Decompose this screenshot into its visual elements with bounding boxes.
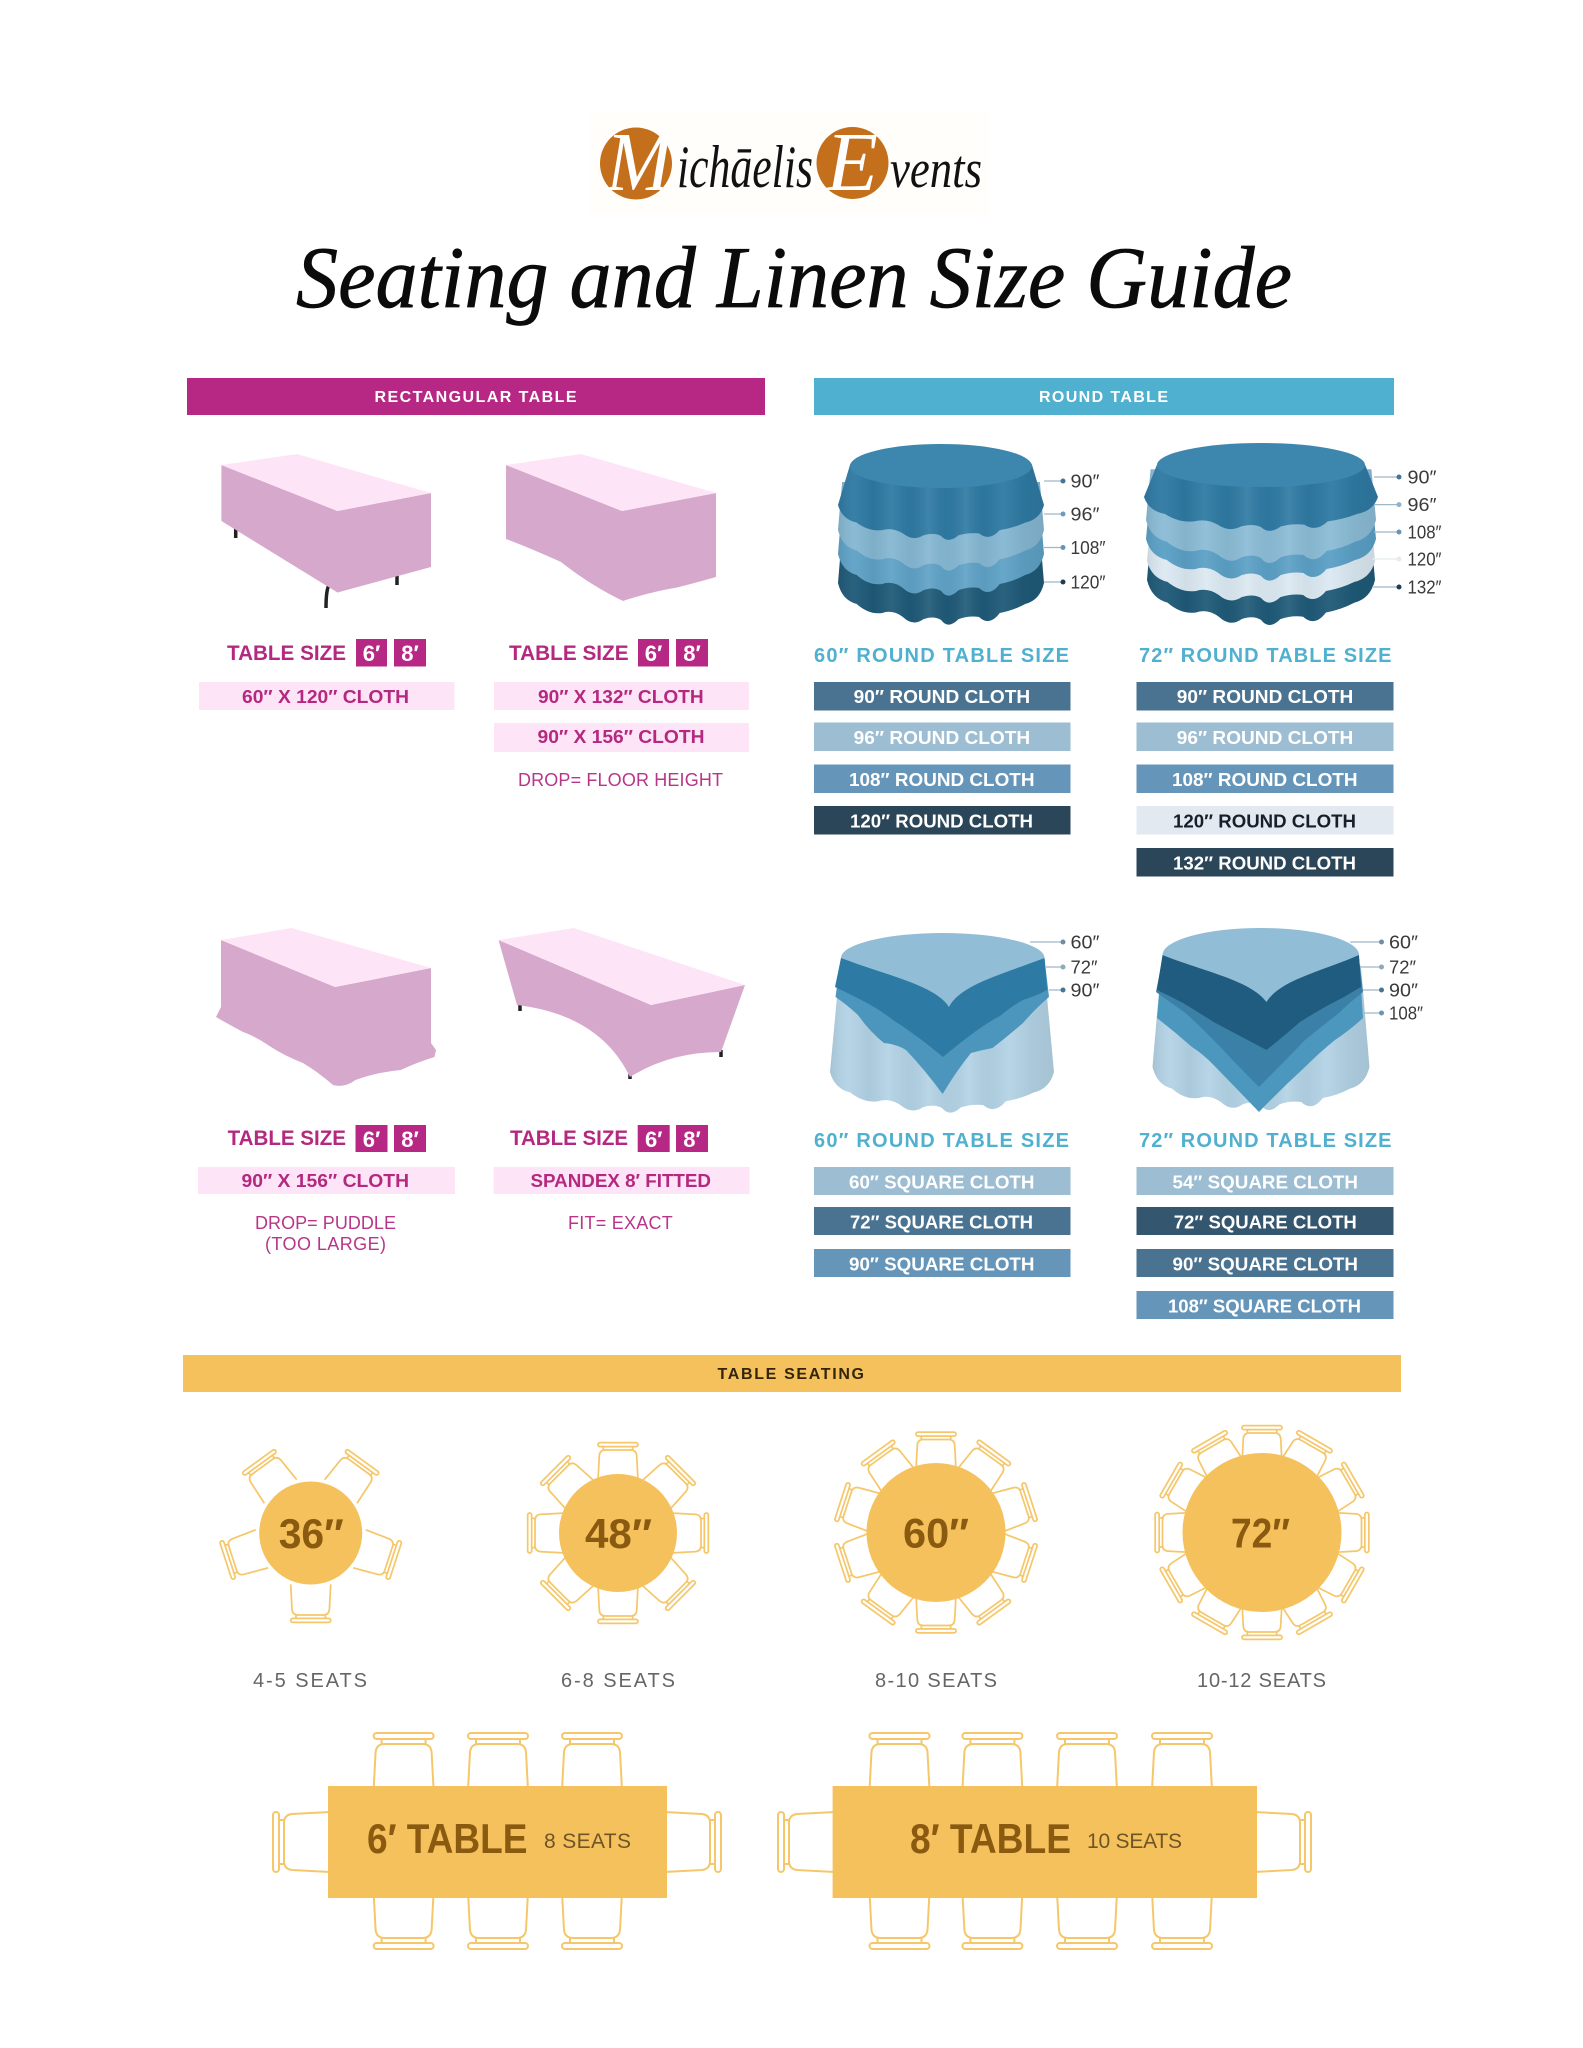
size labels: 72 inch overlays bbox=[1350, 932, 1424, 1024]
cloth list: 60 inch round: 96″ ROUND CLOTH bbox=[854, 728, 1030, 748]
logo: vents bbox=[890, 139, 982, 199]
cloth list: 60 inch square: 72″ SQUARE CLOTH bbox=[850, 1212, 1033, 1232]
label: table size: TABLE SIZE bbox=[509, 642, 629, 665]
diagram: 60 inch round table bbox=[834, 1432, 1038, 1633]
size labels: 72 inch round: 108″ bbox=[1408, 522, 1442, 542]
diagram: 8 foot rectangular table: 10 SEATS bbox=[1087, 1830, 1182, 1853]
size labels: 60 inch overlays: 72″ bbox=[1070, 958, 1098, 978]
logo bbox=[590, 112, 990, 216]
cloth list: 72 inch square: 72″ SQUARE CLOTH bbox=[1174, 1212, 1357, 1232]
header: table seating: TABLE SEATING bbox=[718, 1366, 864, 1383]
label: 60 inch seats: 8-10 SEATS bbox=[875, 1670, 997, 1692]
illustration: 60 inch table square overlays bbox=[830, 933, 1054, 1113]
size labels: 72 inch overlays: 108″ bbox=[1389, 1004, 1424, 1024]
label: table size: 6′ bbox=[363, 1127, 380, 1152]
cloth band bbox=[494, 682, 749, 710]
cloth list: 60 inch square: 60″ SQUARE CLOTH bbox=[849, 1172, 1034, 1192]
label: table size: 8′ bbox=[401, 1127, 419, 1152]
header: rectangular table bbox=[187, 378, 765, 415]
label: table size: TABLE SIZE bbox=[510, 1127, 628, 1150]
label: table size bbox=[509, 639, 708, 666]
cloth list: 72 inch round: 108″ ROUND CLOTH bbox=[1172, 770, 1358, 790]
label: table size bbox=[228, 1125, 426, 1152]
size labels: 60 inch round bbox=[1044, 472, 1106, 592]
diagram: 8 foot rectangular table bbox=[778, 1733, 1311, 1949]
size labels: 72 inch overlays: 60″ bbox=[1389, 932, 1419, 952]
cloth band bbox=[198, 1167, 455, 1194]
cloth list: 72 inch round bbox=[1136, 682, 1394, 876]
header: rectangular table: RECTANGULAR TABLE bbox=[374, 389, 577, 406]
panel: rectangular table bbox=[187, 378, 765, 1254]
note: drop bbox=[255, 1213, 396, 1254]
label: table size: 6′ bbox=[363, 641, 380, 666]
size labels: 72 inch overlays: 90″ bbox=[1389, 980, 1419, 1000]
diagram: 72 inch round table bbox=[1155, 1426, 1369, 1639]
diagram: 36 inch round table bbox=[220, 1449, 402, 1622]
diagram: 8 foot rectangular table: 8′ TABLE bbox=[910, 1815, 1071, 1862]
label: 48 inch seats: 6-8 SEATS bbox=[561, 1670, 675, 1692]
diagram: 6 foot rectangular table: 6′ TABLE bbox=[367, 1815, 528, 1862]
cloth list: 60 inch round: 90″ ROUND CLOTH bbox=[854, 687, 1030, 707]
heading: 60 inch square cloths: 60″ ROUND TABLE SIZE bbox=[814, 1130, 1069, 1152]
cloth band bbox=[199, 682, 454, 710]
rect table 1: short cloth bbox=[221, 454, 431, 608]
cloth band: 60″ X 120″ CLOTH bbox=[242, 687, 409, 707]
cloth band: 90″ X 156″ CLOTH bbox=[242, 1171, 409, 1191]
cloth band: SPANDEX 8′ FITTED bbox=[530, 1171, 711, 1191]
label: 72 inch seats: 10-12 SEATS bbox=[1197, 1670, 1326, 1692]
label: table size bbox=[510, 1125, 708, 1152]
cloth list: 72 inch square: 108″ SQUARE CLOTH bbox=[1168, 1296, 1361, 1316]
size labels: 72 inch round: 132″ bbox=[1408, 578, 1442, 598]
label: table size: TABLE SIZE bbox=[228, 1127, 346, 1150]
logo: ichāelis bbox=[677, 134, 813, 200]
cloth list: 72 inch square: 54″ SQUARE CLOTH bbox=[1172, 1172, 1358, 1192]
diagram: 48 inch round table: 48″ bbox=[585, 1510, 652, 1557]
cloth list: 72 inch round: 96″ ROUND CLOTH bbox=[1177, 728, 1353, 748]
illustration: 72 inch round table layered cloths bbox=[1144, 443, 1378, 625]
cloth list: 60 inch square bbox=[814, 1167, 1070, 1277]
label: 36 inch seats: 4-5 SEATS bbox=[253, 1670, 367, 1692]
diagram: 6 foot rectangular table bbox=[273, 1733, 721, 1949]
size labels: 72 inch overlays: 72″ bbox=[1389, 958, 1417, 978]
cloth list: 60 inch square: 90″ SQUARE CLOTH bbox=[849, 1254, 1034, 1274]
note: drop: DROP= PUDDLE bbox=[255, 1213, 396, 1233]
cloth band: 90″ X 132″ CLOTH bbox=[538, 687, 704, 707]
label: table size: 8′ bbox=[401, 641, 419, 666]
logo: M bbox=[605, 116, 676, 209]
label: table size: 6′ bbox=[645, 1127, 662, 1152]
note: fit: FIT= EXACT bbox=[568, 1213, 673, 1233]
illustration: 72 inch table square overlays bbox=[1152, 928, 1370, 1112]
title: Seating and Linen Size Guide bbox=[296, 230, 1292, 327]
header: table seating bbox=[183, 1355, 1401, 1392]
diagram: 6 foot rectangular table: 8 SEATS bbox=[544, 1830, 631, 1853]
size labels: 60 inch round: 90″ bbox=[1070, 472, 1100, 492]
size labels: 60 inch overlays: 90″ bbox=[1070, 980, 1100, 1000]
label: table size: 8′ bbox=[683, 1127, 701, 1152]
panel: table seating bbox=[183, 1355, 1401, 1949]
diagram: 60 inch round table: 60″ bbox=[903, 1510, 969, 1557]
cloth band: 90″ X 156″ CLOTH bbox=[538, 727, 704, 747]
size labels: 72 inch round: 120″ bbox=[1408, 550, 1442, 570]
illustration: 60 inch round table layered cloths bbox=[838, 444, 1044, 625]
cloth band bbox=[494, 1167, 750, 1194]
size labels: 60 inch round: 96″ bbox=[1070, 504, 1100, 524]
size labels: 60 inch overlays: 60″ bbox=[1070, 932, 1100, 952]
header: round table: ROUND TABLE bbox=[1039, 389, 1168, 406]
cloth list: 72 inch round: 90″ ROUND CLOTH bbox=[1177, 687, 1353, 707]
size labels: 72 inch round bbox=[1372, 468, 1442, 598]
rect table 3: puddle bbox=[216, 928, 436, 1086]
size labels: 60 inch round: 108″ bbox=[1070, 538, 1106, 558]
size labels: 60 inch overlays bbox=[1030, 932, 1100, 1000]
cloth list: 72 inch square bbox=[1136, 1167, 1394, 1319]
heading: 72 inch square cloths: 72″ ROUND TABLE SIZE bbox=[1139, 1130, 1392, 1152]
panel: round table bbox=[814, 378, 1442, 1319]
diagram: 36 inch round table: 36″ bbox=[279, 1510, 344, 1557]
cloth list: 60 inch round: 108″ ROUND CLOTH bbox=[849, 770, 1034, 790]
size labels: 72 inch round: 90″ bbox=[1408, 468, 1437, 488]
note: drop: DROP= FLOOR HEIGHT bbox=[518, 770, 723, 790]
rect table 4: spandex bbox=[498, 928, 745, 1079]
cloth list: 60 inch round: 120″ ROUND CLOTH bbox=[850, 812, 1033, 832]
cloth list: 72 inch round: 120″ ROUND CLOTH bbox=[1173, 812, 1356, 832]
logo: E bbox=[825, 116, 878, 209]
label: table size bbox=[227, 639, 426, 666]
heading: 72 inch round cloths: 72″ ROUND TABLE SIZE bbox=[1139, 645, 1392, 667]
heading: 60 inch round cloths: 60″ ROUND TABLE SIZE bbox=[814, 645, 1069, 667]
label: table size: TABLE SIZE bbox=[227, 642, 346, 665]
label: table size: 8′ bbox=[683, 641, 701, 666]
cloth list: 72 inch round: 132″ ROUND CLOTH bbox=[1173, 854, 1356, 874]
rect table 2: floor cloth bbox=[506, 454, 716, 601]
cloth band bbox=[494, 723, 749, 752]
size labels: 72 inch round: 96″ bbox=[1408, 495, 1437, 515]
cloth list: 72 inch square: 90″ SQUARE CLOTH bbox=[1172, 1254, 1358, 1274]
label: table size: 6′ bbox=[645, 641, 662, 666]
diagram: 48 inch round table bbox=[528, 1443, 708, 1623]
diagram: 72 inch round table: 72″ bbox=[1231, 1510, 1290, 1557]
size labels: 60 inch round: 120″ bbox=[1070, 572, 1106, 592]
header: round table bbox=[814, 378, 1394, 415]
cloth list: 60 inch round bbox=[814, 682, 1070, 834]
note: drop: (TOO LARGE) bbox=[265, 1234, 386, 1254]
